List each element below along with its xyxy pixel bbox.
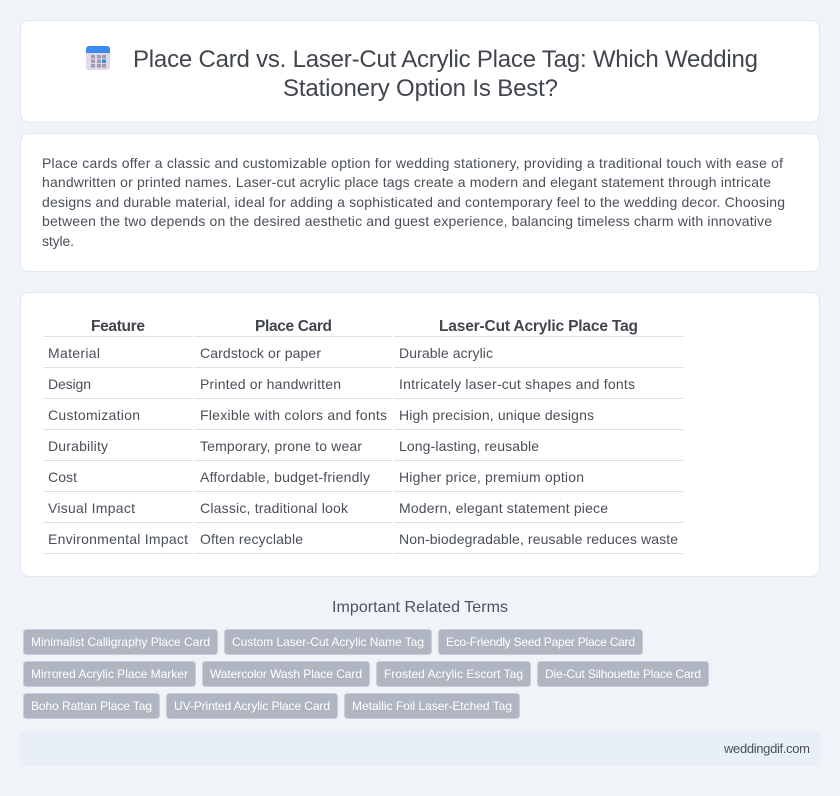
tag	[438, 630, 642, 654]
tag	[202, 662, 370, 686]
title: Place Card vs. Laser-Cut Acrylic Place Tag: Which Wedding	[133, 46, 758, 73]
text block: introduction paragraph: style.	[42, 233, 74, 249]
tag	[166, 694, 338, 718]
row: durability: Temporary, prone to wear	[200, 438, 362, 454]
row: cost: Affordable, budget-friendly	[200, 469, 370, 485]
icon: calendar	[86, 46, 110, 70]
tag: Minimalist Calligraphy Place Card	[31, 635, 210, 649]
row: cost: Higher price, premium option	[399, 469, 584, 485]
text block: introduction paragraph	[42, 155, 785, 249]
row: material: Durable acrylic	[399, 345, 493, 361]
row: durability: Long-lasting, reusable	[399, 438, 539, 454]
row: environmental impact	[48, 531, 678, 547]
tag	[376, 662, 530, 686]
row: material: Cardstock or paper	[200, 345, 321, 361]
row: cost	[48, 469, 584, 485]
row: material: Material	[48, 345, 100, 361]
table header: Laser-Cut Acrylic Place Tag	[439, 318, 638, 335]
panel: introduction	[20, 134, 820, 272]
tags: related terms	[24, 630, 708, 718]
tag: Custom Laser-Cut Acrylic Name Tag	[232, 635, 424, 649]
tag	[24, 694, 160, 718]
text block: introduction paragraph: handwritten or printed names. Laser-cut acrylic place tags create a modern and elegant statement through intricate	[42, 174, 771, 190]
footer	[20, 732, 820, 766]
footer text: source: weddingdif.com	[723, 741, 810, 756]
tag	[538, 662, 708, 686]
row: design: Printed or handwritten	[200, 376, 341, 392]
tag: Mirrored Acrylic Place Marker	[31, 667, 188, 681]
title	[133, 46, 758, 102]
tag: Die-Cut Silhouette Place Card	[545, 667, 701, 681]
title: Stationery Option Is Best?	[283, 75, 558, 102]
tag	[24, 662, 196, 686]
panel: comparison table	[20, 292, 820, 576]
row: design	[48, 376, 635, 392]
row: material	[48, 345, 493, 361]
row: design: Intricately laser-cut shapes and fonts	[399, 376, 635, 392]
row: durability: Durability	[48, 438, 108, 454]
tag: Watercolor Wash Place Card	[210, 667, 362, 681]
table header	[91, 318, 638, 335]
tag: Eco-Friendly Seed Paper Place Card	[446, 635, 635, 649]
row: customization: Customization	[48, 407, 140, 423]
row: customization: High precision, unique designs	[399, 407, 594, 423]
row: environmental impact: Often recyclable	[200, 531, 303, 547]
tag: UV-Printed Acrylic Place Card	[174, 699, 330, 713]
tag: Boho Rattan Place Tag	[31, 699, 152, 713]
header panel	[20, 20, 820, 122]
row: visual impact: Visual Impact	[48, 500, 135, 516]
row: visual impact	[48, 500, 608, 516]
row: design: Design	[48, 376, 91, 392]
tag	[344, 694, 520, 718]
row: customization: Flexible with colors and fonts	[200, 407, 387, 423]
table header: Place Card	[255, 318, 332, 335]
tag	[24, 630, 218, 654]
row: customization	[48, 407, 594, 423]
row: environmental impact: Non-biodegradable, reusable reduces waste	[399, 531, 678, 547]
row: environmental impact: Environmental Impact	[48, 531, 188, 547]
text block: introduction paragraph: designs and durable material, ideal for adding a sophisticated and contemporary feel to the wedding decor. Choosing	[42, 194, 785, 210]
text block: introduction paragraph: Place cards offer a classic and customizable option for wedding stationery, providing a traditional touch with ease of	[42, 155, 783, 171]
row: visual impact: Modern, elegant statement piece	[399, 500, 608, 516]
heading: important related terms: Important Related Terms	[332, 599, 508, 616]
tag: Frosted Acrylic Escort Tag	[384, 667, 523, 681]
tag: Metallic Foil Laser-Etched Tag	[352, 699, 512, 713]
table header: Feature	[91, 318, 145, 335]
text block: introduction paragraph: between the two depends on the desired aesthetic and guest experience, balancing timeless charm with innovative	[42, 213, 772, 229]
tag	[224, 630, 432, 654]
row: visual impact: Classic, traditional look	[200, 500, 349, 516]
row: cost: Cost	[48, 469, 77, 485]
row: durability	[48, 438, 539, 454]
